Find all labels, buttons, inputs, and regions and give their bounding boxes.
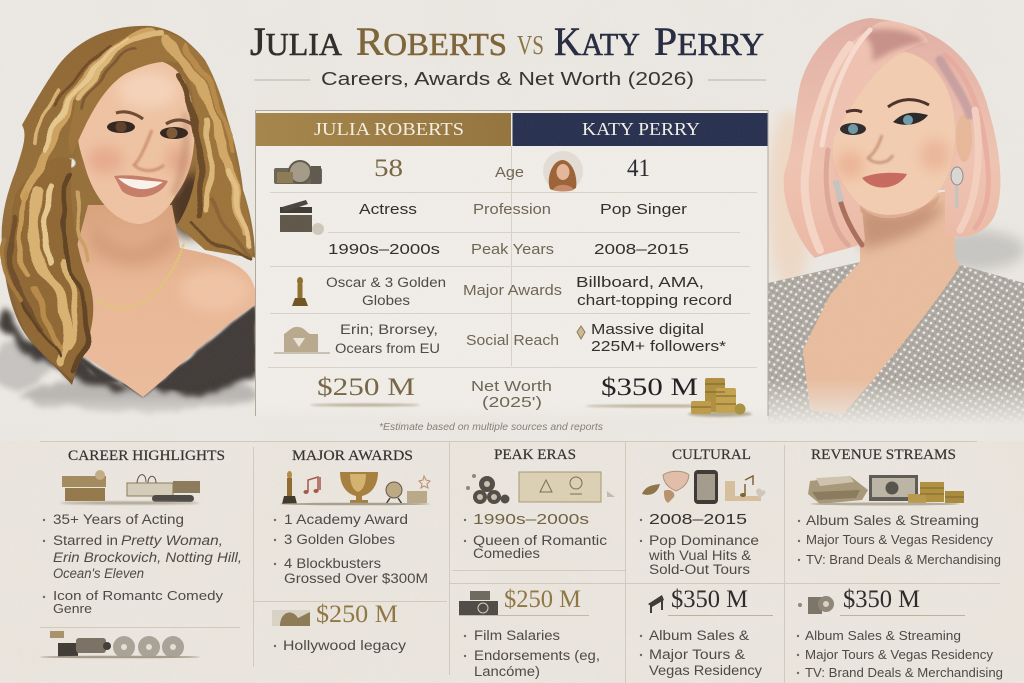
row: age: 58 xyxy=(374,155,403,182)
row: major awards: chart-topping record xyxy=(577,292,732,309)
earrings xyxy=(951,167,963,185)
bullet list: 2008–2015 xyxy=(649,511,747,528)
bullet list: Erin Brockovich, Notting Hill, xyxy=(53,550,242,565)
row: major awards xyxy=(292,274,732,309)
row: net worth: (2025') xyxy=(482,395,542,411)
bullet list xyxy=(43,512,242,616)
bullet list: 4 Blockbusters xyxy=(284,556,381,571)
row: peak years: 2008–2015 xyxy=(594,241,689,258)
title xyxy=(250,19,764,64)
icon group: film memorabilia xyxy=(60,470,200,504)
bullet list: 1990s–2000s xyxy=(473,511,589,528)
header: Julia Roberts: JULIA ROBERTS xyxy=(314,119,464,139)
revenue list xyxy=(797,629,1003,680)
brows xyxy=(846,100,929,112)
revenue list: TV: Brand Deals & Merchandising xyxy=(805,666,1003,680)
legacy note: Hollywood legacy xyxy=(283,638,406,653)
row: peak years xyxy=(328,241,689,258)
smudge behind hair xyxy=(925,230,1024,270)
revenue list: Major Tours & xyxy=(649,647,745,662)
hair back xyxy=(2,26,255,385)
revenue list: Endorsements (eg, xyxy=(474,648,600,663)
row: major awards: Major Awards xyxy=(463,283,562,299)
bullet list: Grossed Over $300M xyxy=(284,571,428,586)
bullet list: Genre xyxy=(53,601,92,616)
comparison table panel xyxy=(256,110,768,423)
revenue list xyxy=(464,628,600,679)
bullet list: Pop Dominance xyxy=(649,533,759,548)
heading: CULTURAL xyxy=(672,447,751,463)
row: net worth: $250 M xyxy=(317,374,415,401)
row: age: Age xyxy=(495,165,524,181)
panel: career highlights xyxy=(40,448,242,658)
bullet list: TV: Brand Deals & Merchandising xyxy=(806,553,1001,567)
face xyxy=(78,60,194,224)
heading: REVENUE STREAMS xyxy=(811,447,956,463)
dress xyxy=(0,305,255,397)
revenue list: Lancóme) xyxy=(474,664,540,679)
subtitle: Careers, Awards & Net Worth (2026) xyxy=(321,69,694,89)
icon group: camera and film reels xyxy=(40,631,200,658)
row: major awards: Globes xyxy=(362,293,410,308)
row: profession: Profession xyxy=(473,202,551,218)
header: Katy Perry xyxy=(512,113,768,146)
bullet list: Starred in xyxy=(53,533,118,548)
icon group: phone, heart and music xyxy=(642,470,766,504)
net worth figure: $350 M xyxy=(671,586,748,613)
icon: camera props xyxy=(274,161,322,184)
icon: diamond xyxy=(577,326,585,339)
bullet list xyxy=(274,512,428,586)
bullet list xyxy=(798,513,1001,567)
row: net worth xyxy=(310,374,752,417)
icon group: cash, screen and coins xyxy=(808,475,964,506)
bullet list: with Vual Hits & xyxy=(648,548,751,563)
net worth figure: $250 M xyxy=(316,601,398,628)
row: age xyxy=(274,151,650,192)
sequin dress xyxy=(768,262,1024,425)
nose xyxy=(868,135,893,163)
revenue list: Film Salaries xyxy=(474,628,560,643)
bullet list: Pretty Woman, xyxy=(121,533,223,548)
panel: revenue streams xyxy=(797,447,1003,680)
title: KATY xyxy=(554,19,640,64)
row: social reach: 225M+ followers* xyxy=(591,338,726,355)
eyes xyxy=(107,121,135,133)
nose xyxy=(134,130,164,171)
net worth figure xyxy=(798,586,965,616)
bullet list: Sold-Out Tours xyxy=(649,562,750,577)
face xyxy=(833,52,955,218)
portrait: Julia Roberts xyxy=(0,26,260,424)
brows xyxy=(116,112,193,125)
row: social reach: Massive digital xyxy=(591,321,704,338)
net worth figure xyxy=(459,586,589,616)
panel: major awards xyxy=(272,448,430,653)
bullet list: Major Tours & Vegas Residency xyxy=(806,533,994,547)
revenue list: Vegas Residency xyxy=(649,663,762,678)
icon group: reels and ticket xyxy=(466,472,615,504)
net worth figure: $250 M xyxy=(504,586,581,613)
row: net worth: Net Worth xyxy=(471,379,552,395)
row: profession xyxy=(280,200,687,235)
heading: PEAK ERAS xyxy=(494,447,576,463)
hair back xyxy=(784,18,1000,258)
ear xyxy=(956,114,972,162)
portrait: Katy Perry xyxy=(768,18,1024,425)
title: PERRY xyxy=(654,19,764,64)
bullet list: 1 Academy Award xyxy=(284,512,408,527)
fringe xyxy=(814,21,928,170)
icon: coin stacks xyxy=(688,378,752,417)
panel: cultural xyxy=(640,447,773,678)
earring xyxy=(66,158,76,168)
title: VS xyxy=(517,30,544,60)
smudge below portrait xyxy=(20,378,260,412)
revenue list: Major Tours & Vegas Residency xyxy=(805,648,994,662)
row: age: 41 xyxy=(627,155,650,182)
soft bottom fade xyxy=(768,380,1024,425)
eyes xyxy=(840,123,866,135)
bullet list: 3 Golden Globes xyxy=(284,532,395,547)
bullet list: Queen of Romantic xyxy=(473,533,607,548)
bullet list: Album Sales & Streaming xyxy=(806,513,979,528)
icon: studio building xyxy=(274,327,330,354)
bullet list: Ocean's Eleven xyxy=(53,566,144,581)
chest and neck xyxy=(65,205,255,397)
bullet list: Icon of Romantc Comedy xyxy=(53,588,224,603)
lips xyxy=(862,173,907,188)
net worth figure xyxy=(272,601,398,628)
revenue list: Album Sales & Streaming xyxy=(805,629,961,643)
revenue list: Album Sales & xyxy=(649,628,749,643)
net worth figure: $350 M xyxy=(843,586,920,613)
title: JULIA xyxy=(250,19,342,64)
footnote: *Estimate based on multiple sources and reports xyxy=(379,421,604,433)
icon: small portrait avatar xyxy=(543,151,583,192)
row: social reach xyxy=(274,321,726,356)
bullet list: Comedies xyxy=(473,546,540,561)
header: Katy Perry: KATY PERRY xyxy=(582,119,700,139)
icon: clapperboard xyxy=(280,200,324,235)
skin neck and chest xyxy=(803,190,960,415)
heading: CAREER HIGHLIGHTS xyxy=(68,448,225,464)
net worth figure xyxy=(648,586,773,616)
title: ROBERTS xyxy=(356,19,507,64)
bullet list xyxy=(464,511,607,561)
row: social reach: Ocears from EU xyxy=(335,341,440,356)
hair strands xyxy=(5,34,252,370)
icon group: trophies and music notes xyxy=(280,471,430,505)
row: peak years: 1990s–2000s xyxy=(328,241,440,258)
row: profession: Pop Singer xyxy=(600,201,687,218)
header: Julia Roberts xyxy=(256,113,511,146)
row: major awards: Oscar & 3 Golden xyxy=(326,275,446,290)
necklace xyxy=(96,243,184,308)
mouth xyxy=(114,175,168,197)
bullet list xyxy=(640,511,759,577)
row: net worth: $350 M xyxy=(601,374,698,401)
row: social reach: Social Reach xyxy=(466,333,559,349)
row: profession: Actress xyxy=(359,201,417,218)
hair front xyxy=(69,30,253,258)
hair strands xyxy=(805,30,988,250)
revenue list xyxy=(640,628,762,678)
row: peak years: Peak Years xyxy=(471,242,554,258)
icon: Oscar statuette xyxy=(292,277,308,306)
soft bottom fade xyxy=(0,396,255,424)
heading: MAJOR AWARDS xyxy=(292,448,413,464)
row: major awards: Billboard, AMA, xyxy=(576,274,704,291)
bullet list: 35+ Years of Acting xyxy=(53,512,184,527)
row: social reach: Erin; Brorsey, xyxy=(340,322,438,337)
panel: peak eras xyxy=(459,447,615,679)
